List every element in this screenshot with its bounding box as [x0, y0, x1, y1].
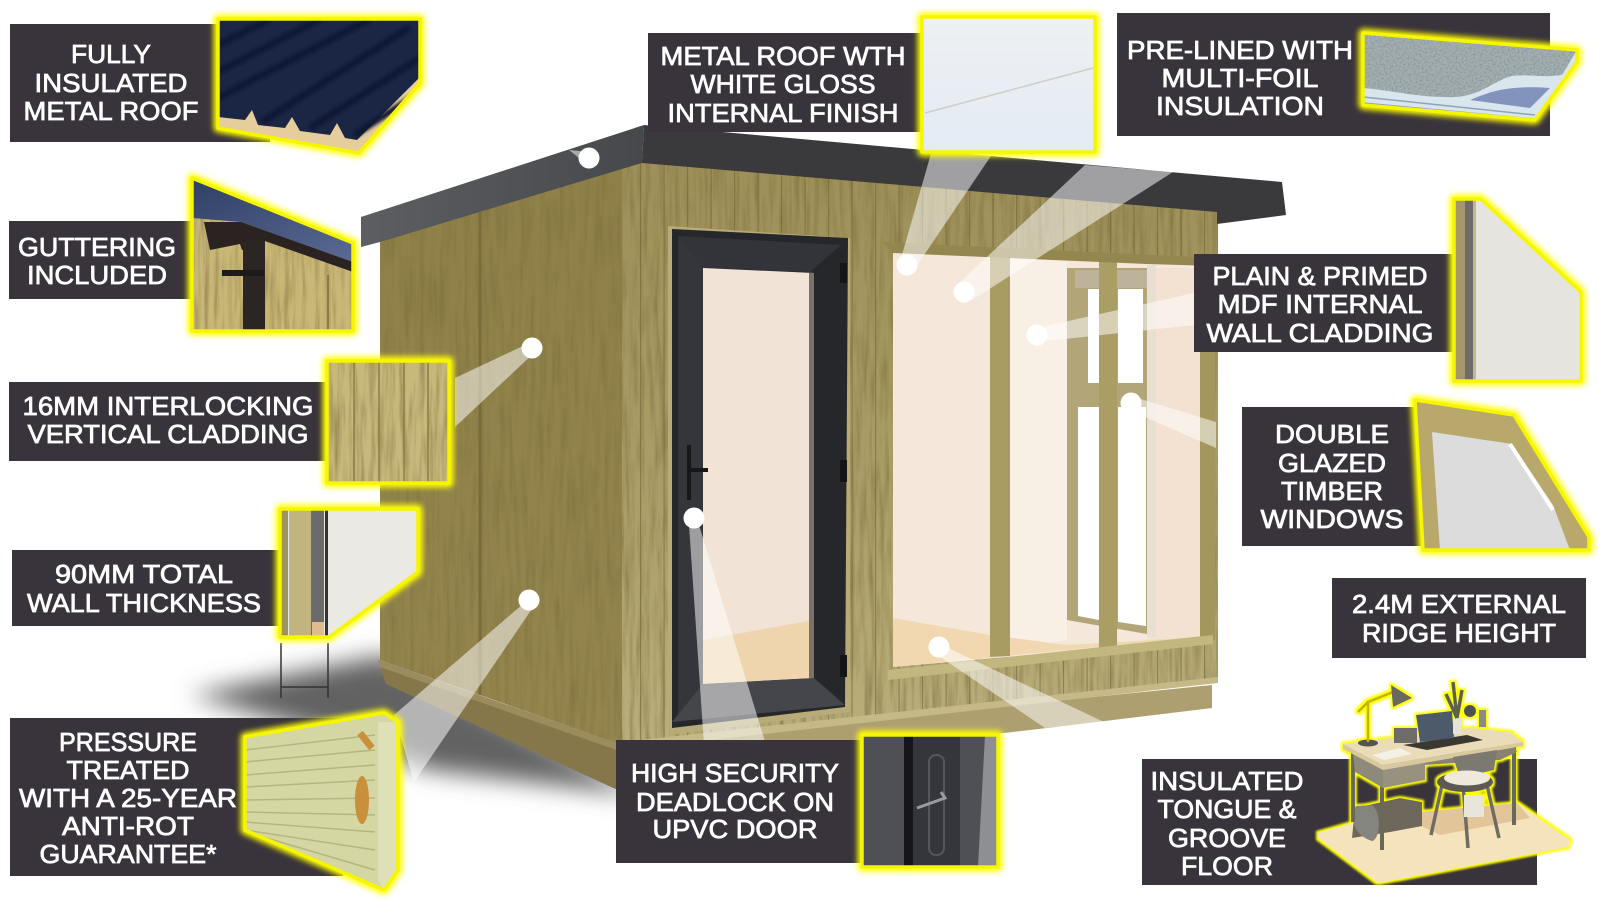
callout: multi-foil insulation: INSULATION [1156, 91, 1324, 121]
callout: fully insulated metal roof [10, 19, 420, 153]
dimension legs [281, 643, 328, 698]
callout: white gloss internal finish: METAL ROOF WTH [660, 41, 906, 71]
callout: pressure treated 25-year guarantee: WITH A 25-YEAR [19, 783, 237, 813]
callout: insulated tongue and groove floor: INSULATED [1150, 766, 1304, 796]
callout: double glazed timber windows [1242, 400, 1589, 550]
thumbnail: MDF section [1454, 199, 1581, 381]
thumbnail: gutter [192, 178, 353, 340]
thumbnail: roof panel [218, 19, 420, 153]
rear window [1067, 268, 1147, 634]
mat and laptop [1403, 735, 1483, 750]
callout: 90mm total wall thickness: WALL THICKNESS [27, 588, 261, 618]
callout: multi-foil insulation: PRE-LINED WITH [1127, 35, 1353, 65]
callout: white gloss internal finish: INTERNAL FINISH [668, 98, 898, 128]
callout: multi-foil insulation [1117, 13, 1577, 136]
window opening [883, 242, 1215, 680]
callout: insulated tongue and groove floor: TONGUE & [1158, 794, 1296, 824]
callout: high security deadlock: HIGH SECURITY [631, 758, 839, 788]
thumbnail: cladding [327, 361, 449, 483]
callout: guttering included [9, 178, 353, 340]
window posts [990, 254, 1010, 657]
chair [1431, 750, 1499, 848]
storage boxes [1352, 798, 1422, 838]
building: garden room [361, 125, 1286, 795]
callout: 16mm interlocking vertical cladding [9, 361, 449, 483]
thumbnail: white gloss panel [922, 17, 1095, 152]
callout: high security deadlock: UPVC DOOR [652, 814, 818, 844]
thumbnail: foil [1363, 33, 1577, 120]
callout: pressure treated 25-year guarantee [10, 713, 398, 890]
callout: fully insulated metal roof: FULLY [71, 39, 151, 69]
thumbnail: door lock [862, 735, 998, 867]
callout: 90mm total wall thickness [12, 509, 418, 698]
callout: pressure treated 25-year guarantee: GUARANTEE* [40, 839, 216, 869]
books [1394, 728, 1417, 743]
callout: 16mm interlocking vertical cladding: 16MM INTERLOCKING [22, 391, 314, 421]
callout: white gloss internal finish: WHITE GLOSS [690, 69, 876, 99]
thumbnail: wall section [280, 509, 418, 637]
callout: double glazed timber windows: GLAZED [1278, 448, 1386, 478]
callout: insulated tongue and groove floor: GROOVE [1168, 823, 1286, 853]
callout: 16mm interlocking vertical cladding: VERTICAL CLADDING [28, 419, 308, 449]
callout: white gloss internal finish [648, 17, 1095, 152]
front wall [622, 156, 1218, 795]
plinth [622, 685, 1212, 795]
illustration: desk on floor panel [1318, 682, 1570, 883]
hotspot dots [518, 148, 1142, 658]
roof [361, 125, 1286, 247]
callout: pressure treated 25-year guarantee: ANTI-ROT [62, 811, 194, 841]
callout: double glazed timber windows: WINDOWS [1260, 504, 1404, 534]
callout: multi-foil insulation: MULTI-FOIL [1162, 63, 1318, 93]
callout: 90mm total wall thickness: 90MM TOTAL [55, 559, 233, 589]
thumbnail: window section [1415, 400, 1589, 550]
door [668, 226, 850, 735]
callout: double glazed timber windows: TIMBER [1281, 476, 1383, 506]
ground shadow [190, 655, 640, 795]
callout: MDF internal wall cladding: PLAIN & PRIMED [1212, 261, 1428, 291]
light beams to callouts [394, 150, 1216, 782]
callout: MDF internal wall cladding [1194, 199, 1581, 381]
callout: MDF internal wall cladding: MDF INTERNAL [1218, 289, 1422, 319]
callout: pressure treated 25-year guarantee: PRESSURE [59, 727, 197, 757]
thumbnail: timber board [245, 713, 398, 890]
callout: guttering included: INCLUDED [27, 260, 167, 290]
callout: double glazed timber windows: DOUBLE [1275, 419, 1389, 449]
callout: pressure treated 25-year guarantee: TREATED [66, 755, 190, 785]
door handle [689, 445, 708, 500]
left wall [378, 158, 622, 792]
paper [1372, 748, 1412, 760]
callout: 2.4m external ridge height [1332, 578, 1586, 658]
callout: 2.4m external ridge height: RIDGE HEIGHT [1362, 618, 1556, 648]
callout: guttering included: GUTTERING [18, 232, 176, 262]
callout: insulated tongue and groove floor: FLOOR [1181, 851, 1273, 881]
lamp [1358, 685, 1412, 746]
callout: 2.4m external ridge height: 2.4M EXTERNAL [1352, 589, 1566, 619]
callout: fully insulated metal roof: METAL ROOF [24, 96, 198, 126]
callout: insulated tongue and groove floor [1142, 682, 1570, 885]
floor panel [1318, 803, 1570, 883]
callout: fully insulated metal roof: INSULATED [34, 68, 188, 98]
interior floor [893, 618, 1200, 667]
interior wall [893, 252, 1200, 667]
plant and objects [1446, 682, 1486, 734]
lintel and sill [883, 242, 1215, 266]
bin [1464, 795, 1484, 817]
desk [1353, 745, 1514, 850]
callout: high security deadlock: DEADLOCK ON [636, 787, 834, 817]
callout: MDF internal wall cladding: WALL CLADDING [1206, 318, 1434, 348]
callout: high security deadlock [616, 735, 998, 867]
